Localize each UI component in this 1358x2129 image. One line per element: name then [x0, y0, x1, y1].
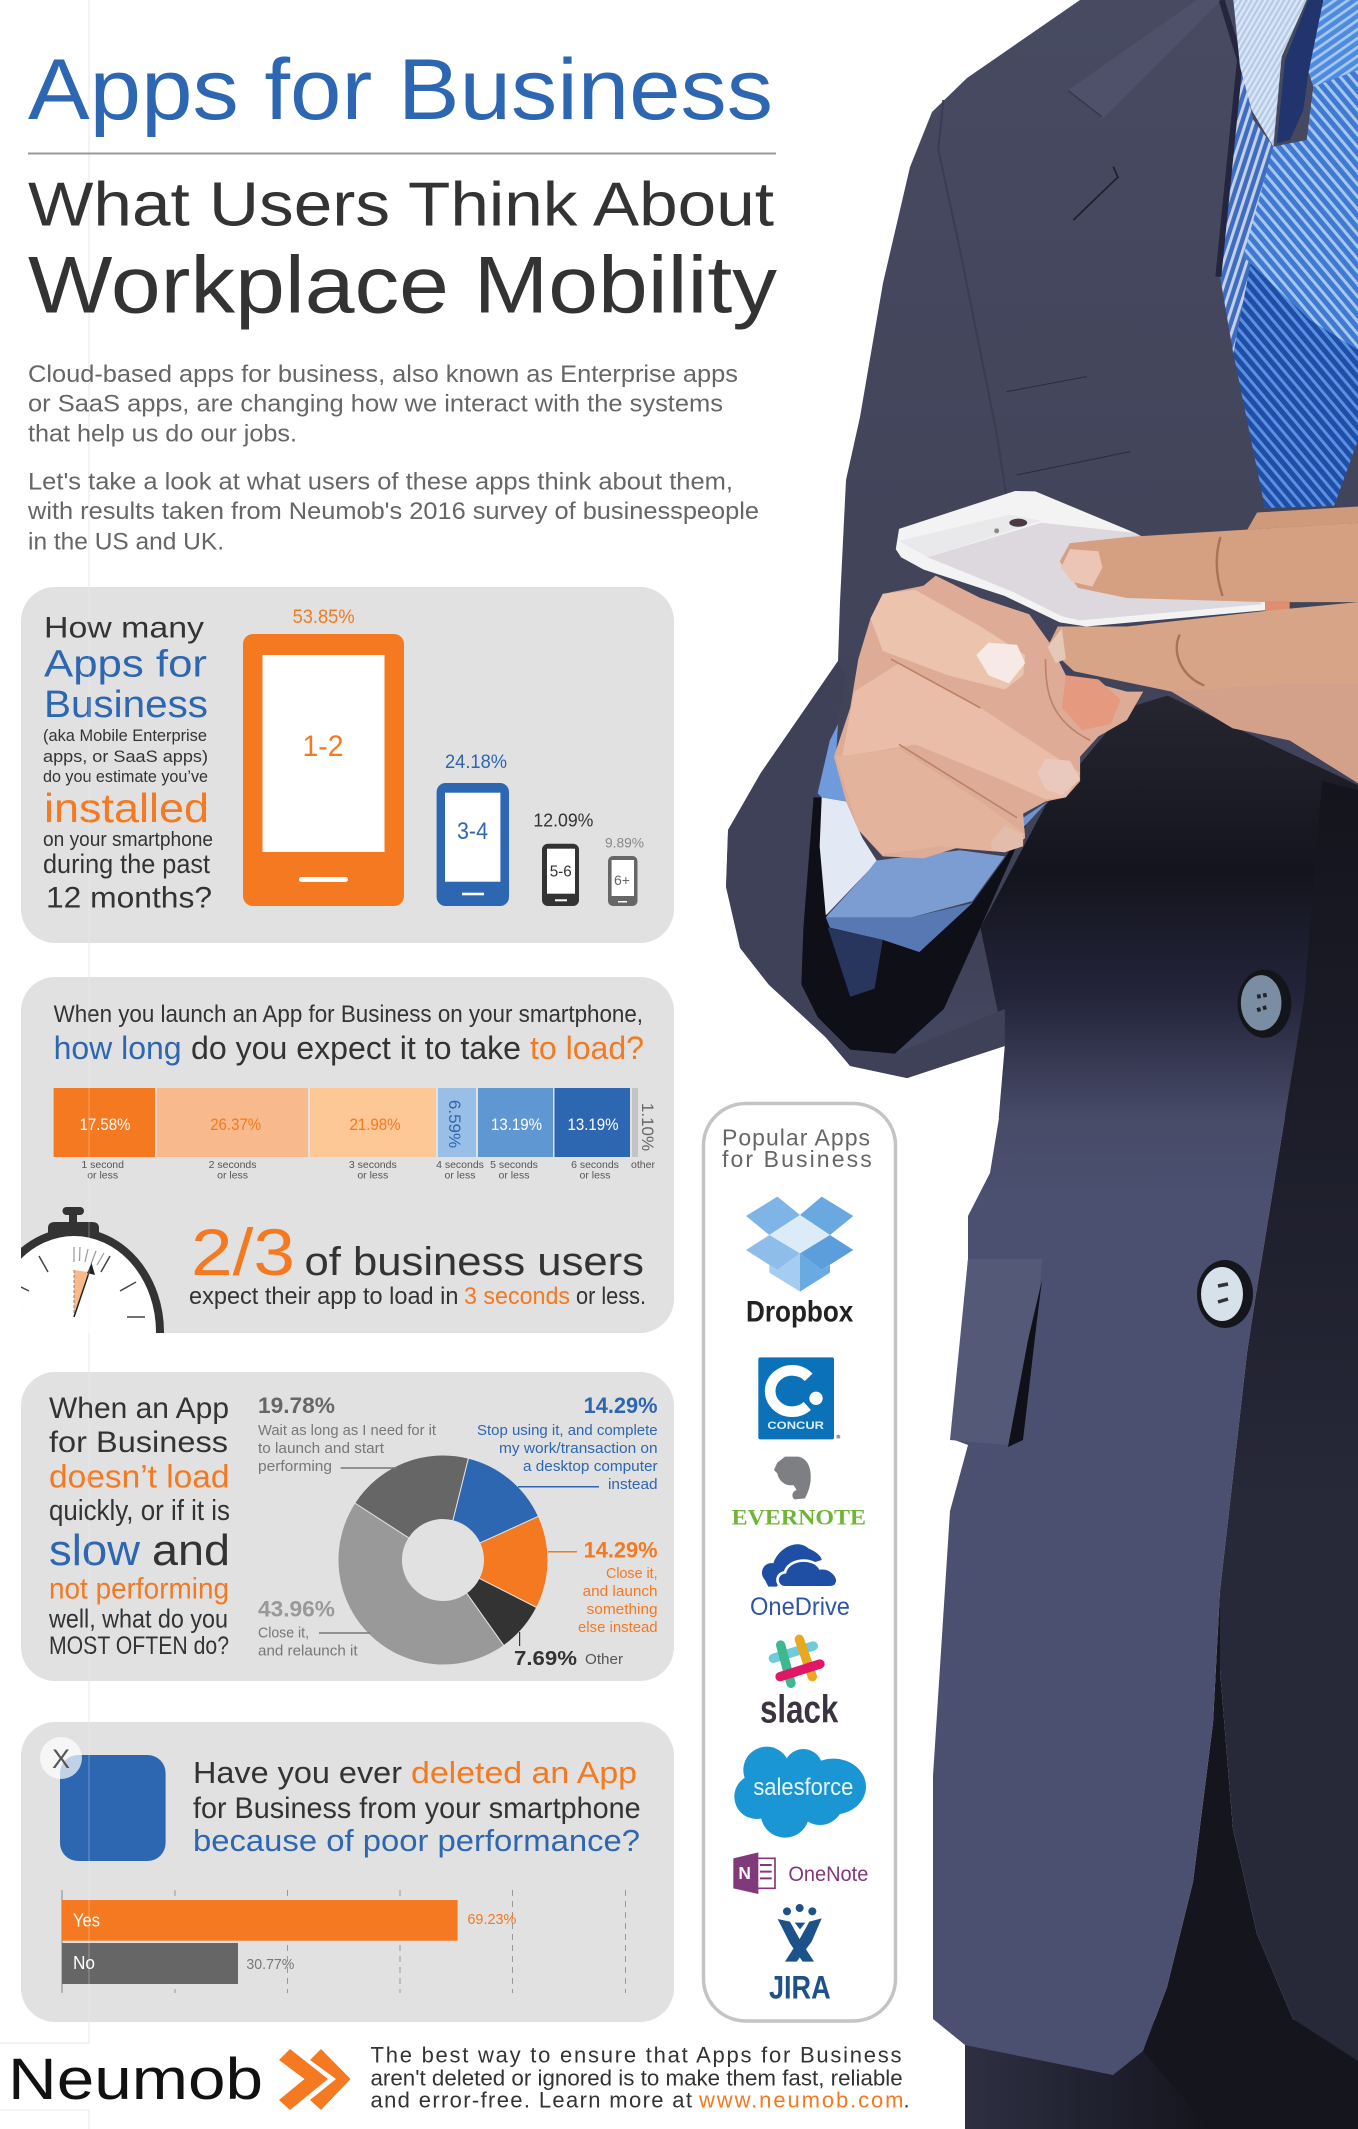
- stacked bar chart: 5 seconds: [490, 1159, 538, 1171]
- stacked bar chart: or less: [499, 1170, 529, 1182]
- shirt cuff: [818, 724, 1048, 952]
- hands, phone and cuff: [726, 491, 1358, 1078]
- logo: OneDrive: [750, 1544, 850, 1621]
- stacked bar chart: 13.19%: [491, 1115, 542, 1134]
- icon: stopwatch: [21, 1207, 164, 1333]
- intro text: Cloud-based apps for business, also known as Enterprise apps: [28, 361, 738, 388]
- logo: Evernote: EVERNOTE: [732, 1504, 866, 1529]
- title: Apps for Business: [28, 42, 773, 138]
- panel: apps installed: [21, 587, 674, 943]
- phone bar: 5-6 apps: 5-6: [550, 864, 572, 881]
- label: wait: performing: [258, 1458, 332, 1475]
- logo: Salesforce: [734, 1747, 866, 1838]
- closing message: [370, 2043, 910, 2113]
- logo: OneDrive: OneDrive: [750, 1593, 850, 1621]
- jacket lapel: [1068, 0, 1222, 118]
- question text: [48, 1392, 230, 1660]
- chest lapel, collar and tie: [938, 0, 1358, 508]
- label: wait: Wait as long as I need for it: [258, 1422, 437, 1439]
- label: stop using: [477, 1393, 658, 1493]
- stacked bar chart: [54, 1088, 657, 1182]
- question text: MOST OFTEN do?: [49, 1632, 229, 1660]
- label: stop using: instead: [608, 1476, 658, 1493]
- label: wait: to launch and start: [258, 1440, 385, 1457]
- logo: Dropbox: [746, 1197, 854, 1329]
- stacked bar chart: or less: [217, 1170, 248, 1182]
- sleeve: [726, 661, 1005, 1078]
- header: [28, 42, 778, 331]
- label: close and relaunch: 43.96%: [258, 1597, 335, 1622]
- stacked bar chart: 6.59%: [445, 1100, 464, 1148]
- icon: app tile with close badge: X: [52, 1744, 70, 1774]
- question text: Business: [44, 684, 208, 726]
- footer: [8, 2043, 910, 2113]
- callout: two thirds: 2/3: [191, 1215, 295, 1289]
- stacked bar chart: 26.37%: [210, 1115, 261, 1134]
- label: other: 7.69%: [514, 1648, 577, 1670]
- label: stop using: Stop using it, and complete: [477, 1422, 658, 1439]
- intro text: that help us do our jobs.: [28, 420, 297, 447]
- label: close and launch else: something: [587, 1601, 658, 1618]
- label: close and relaunch: and relaunch it: [258, 1643, 358, 1660]
- callout: two thirds: expect their app to load in: [189, 1283, 458, 1310]
- stacked bar chart: 21.98%: [350, 1115, 400, 1134]
- logo: Neumob wordmark: Neumob: [8, 2047, 263, 2112]
- bar chart: [62, 1890, 626, 1993]
- question text: on your smartphone: [43, 829, 213, 851]
- question text: [193, 1755, 641, 1858]
- label: close and relaunch: Close it,: [258, 1625, 309, 1642]
- label: close and launch else: Close it,: [606, 1565, 658, 1582]
- closing message: .: [904, 2088, 910, 2113]
- intro text: [27, 361, 759, 555]
- logo: Concur: CONCUR: [767, 1420, 824, 1432]
- bar chart: 69.23%: [467, 1911, 516, 1928]
- stacked bar chart: or less: [357, 1170, 388, 1182]
- panel heading: Popular Apps: [722, 1125, 870, 1151]
- closing message: and error-free. Learn more at: [370, 2088, 692, 2113]
- closing message: www.neumob.com: [698, 2088, 904, 2113]
- question text: well, what do you: [48, 1604, 228, 1634]
- question text: [54, 1001, 644, 1066]
- bar chart: Yes: [73, 1911, 100, 1931]
- question text: Apps for: [44, 644, 207, 686]
- question text: When an App: [49, 1392, 229, 1425]
- stacked bar chart: or less: [580, 1170, 610, 1182]
- logo: OneNote: [733, 1852, 868, 1894]
- label: wait: 19.78%: [258, 1393, 335, 1418]
- question text: (aka Mobile Enterprise: [43, 726, 207, 745]
- stacked bar chart: 17.58%: [80, 1115, 130, 1134]
- shirt stripes: [1220, 60, 1273, 353]
- panel: deleted apps: [21, 1722, 674, 2022]
- question text: [43, 612, 213, 915]
- panel: load time expectations: [21, 977, 674, 1333]
- jacket main body: [726, 0, 1358, 2075]
- panel heading: for Business: [722, 1146, 872, 1172]
- callout: two thirds: [189, 1215, 646, 1310]
- sleeve lining: [801, 797, 1029, 1054]
- phone bar: 1-2 apps: 1-2: [302, 730, 344, 763]
- label: close and launch else: and launch: [583, 1583, 658, 1600]
- label: other: Other: [585, 1651, 623, 1668]
- logo: JIRA: [769, 1904, 831, 2005]
- callout: two thirds: of business users: [304, 1240, 644, 1284]
- question text: How many: [44, 612, 204, 645]
- phone bar: 3-4 apps: [437, 752, 509, 906]
- question text: during the past: [43, 849, 210, 879]
- panel heading: [722, 1125, 872, 1172]
- phone bar: 5-6 apps: 12.09%: [533, 811, 593, 831]
- jacket pocket flap: [950, 1259, 1042, 1447]
- logo: Evernote: [732, 1457, 866, 1529]
- closing message: The best way to ensure that Apps for Business: [370, 2043, 902, 2068]
- donut chart: [338, 1455, 548, 1665]
- bar chart: 30.77%: [246, 1956, 294, 1973]
- intro text: or SaaS apps, are changing how we interact with the systems: [28, 390, 723, 417]
- label: other: [514, 1632, 623, 1670]
- faint vertical guide lines: [0, 0, 89, 2129]
- stacked bar chart: 4 seconds: [436, 1159, 484, 1171]
- shadow between jacket panels: [1143, 1591, 1358, 2129]
- shirt collar: [1233, 0, 1307, 147]
- intro text: in the US and UK.: [28, 528, 224, 555]
- question text: for Business: [49, 1426, 228, 1459]
- photo: businessman using a smartphone: [726, 0, 1358, 2129]
- trousers: [965, 2020, 1358, 2129]
- label: close and launch else: 14.29%: [584, 1538, 658, 1563]
- question text: When you launch an App for Business on your smartphone,: [54, 1001, 643, 1028]
- question text: not performing: [49, 1573, 229, 1606]
- subtitle line two: Workplace Mobility: [28, 241, 778, 331]
- right hand: [1048, 506, 1358, 783]
- phone bar: 3-4 apps: 24.18%: [445, 752, 507, 773]
- question text: deleted an App: [411, 1755, 637, 1790]
- question text: because of poor performance?: [193, 1823, 640, 1858]
- question text: quickly, or if it is: [49, 1495, 230, 1527]
- jacket button lower: [1197, 1260, 1253, 1328]
- bar chart: No: [73, 1953, 95, 1973]
- subtitle line one: What Users Think About: [28, 171, 774, 240]
- panel: slow app behaviour: [21, 1372, 674, 1681]
- question text: 12 months?: [46, 882, 212, 915]
- stacked bar chart: 1.10%: [638, 1103, 657, 1151]
- stacked bar chart: or less: [445, 1170, 475, 1182]
- phone bar: 6+ apps: 6+: [614, 872, 630, 888]
- logo: Slack: [760, 1639, 838, 1731]
- phone bar: 6+ apps: 9.89%: [605, 835, 644, 851]
- stacked bar chart: 2 seconds: [209, 1159, 257, 1171]
- body shadow below hands: [980, 696, 1358, 1118]
- phone bar: 3-4 apps: 3-4: [457, 818, 488, 845]
- callout: two thirds: 3 seconds: [464, 1283, 570, 1310]
- left hand: [834, 576, 1143, 858]
- icon: app tile with close badge: [40, 1737, 166, 1861]
- logo: JIRA: JIRA: [769, 1968, 831, 2005]
- logo: Concur: [758, 1357, 840, 1439]
- jacket right front panel: [1220, 781, 1358, 2061]
- logo: Slack: slack: [760, 1687, 838, 1731]
- intro text: Let's take a look at what users of these apps think about them,: [28, 468, 733, 496]
- question text: do you expect it to take: [191, 1030, 521, 1066]
- stacked bar chart: 3 seconds: [349, 1159, 397, 1171]
- closing message: aren't deleted or ignored is to make them fast, reliable: [370, 2066, 903, 2091]
- question text: Have you ever: [193, 1755, 402, 1790]
- question text: to load?: [530, 1030, 644, 1066]
- question text: how long: [54, 1030, 182, 1066]
- stacked bar chart: 1 second: [81, 1159, 124, 1171]
- question text: apps, or SaaS apps): [43, 747, 208, 766]
- question text: for Business from your smartphone: [193, 1792, 641, 1825]
- question text: installed: [44, 785, 209, 831]
- logo: Dropbox: Dropbox: [746, 1296, 854, 1329]
- stacked bar chart: or less: [87, 1170, 118, 1182]
- callout: two thirds: or less.: [576, 1283, 646, 1310]
- stacked bar chart: 13.19%: [568, 1115, 618, 1134]
- question text: slow: [49, 1526, 140, 1575]
- question text: do you estimate you’ve: [43, 767, 208, 786]
- logo: Salesforce: salesforce: [753, 1774, 853, 1801]
- necktie: [1233, 0, 1358, 508]
- guide line overlay in panels: [88, 587, 90, 2022]
- label: close and launch else: else instead: [578, 1619, 658, 1636]
- smartphone: [896, 491, 1265, 626]
- stacked bar chart: 6 seconds: [571, 1159, 619, 1171]
- label: wait: [258, 1393, 437, 1475]
- question text: doesn’t load: [49, 1459, 230, 1495]
- label: close and relaunch: [258, 1597, 370, 1660]
- panel: popular apps: [704, 1104, 896, 2021]
- phone bar: 5-6 apps: [533, 811, 593, 906]
- label: stop using: my work/transaction on: [499, 1440, 658, 1457]
- logo: OneNote: OneNote: [788, 1861, 868, 1886]
- collar shadow: [1277, 0, 1323, 143]
- label: stop using: a desktop computer: [523, 1458, 658, 1475]
- question text: and: [152, 1526, 230, 1575]
- jacket button upper: [1238, 969, 1291, 1038]
- stacked bar chart: other: [631, 1159, 655, 1171]
- label: stop using: 14.29%: [584, 1393, 658, 1418]
- logo: OneNote: N: [738, 1863, 751, 1883]
- phone bar: 1-2 apps: [243, 607, 404, 906]
- intro text: with results taken from Neumob's 2016 survey of businesspeople: [27, 498, 759, 525]
- label: close and launch else: [548, 1538, 658, 1636]
- phone bar: 6+ apps: [605, 835, 644, 906]
- icon: double chevron arrows: [279, 2049, 350, 2110]
- phone bar: 1-2 apps: 53.85%: [293, 607, 355, 628]
